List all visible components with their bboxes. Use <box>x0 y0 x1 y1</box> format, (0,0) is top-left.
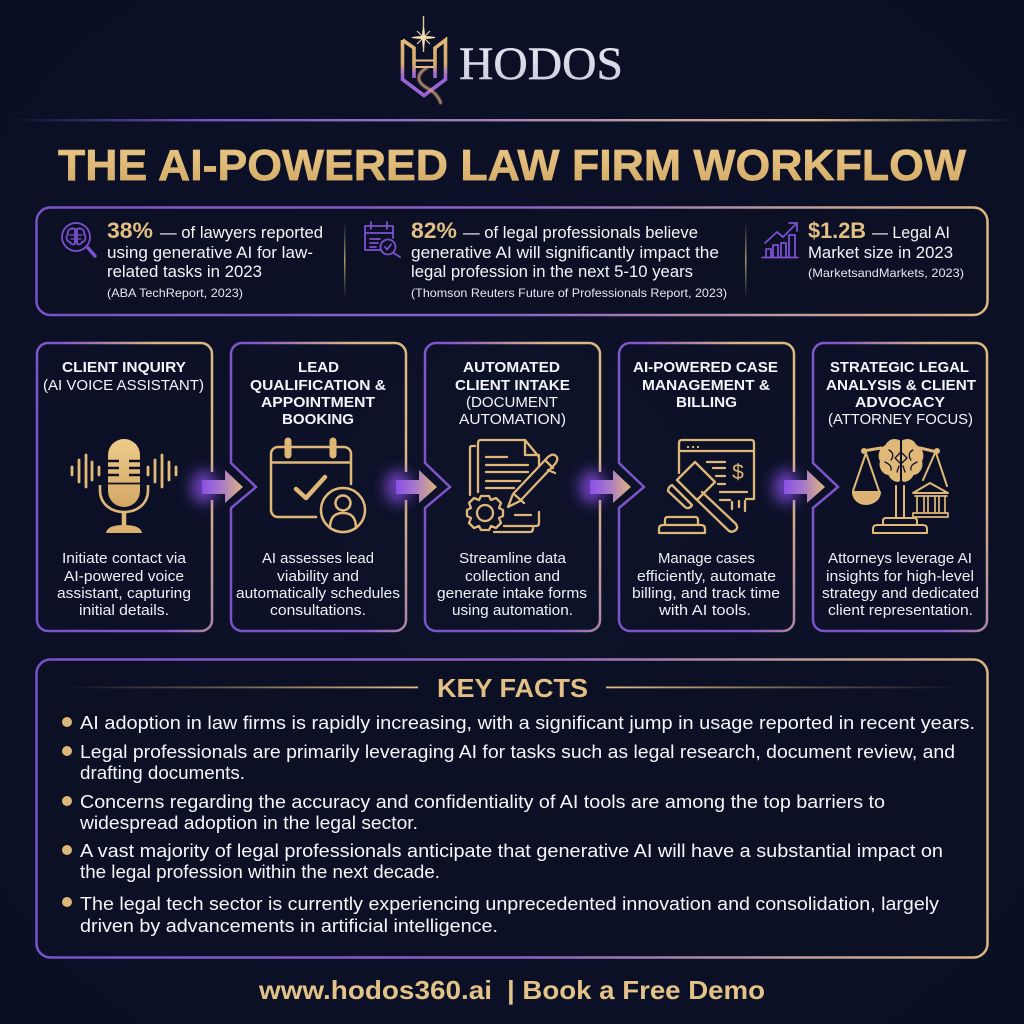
stat: 82 percent: legal profession in the next 5-10 years <box>411 262 693 281</box>
fact 4: the legal profession within the next decade. <box>80 862 440 882</box>
key facts heading: KEY FACTS <box>437 673 588 703</box>
card 4 description: billing, and track time <box>632 586 780 602</box>
card 4 description: efficiently, automate <box>637 569 776 585</box>
card 3 heading: AUTOMATED <box>463 359 560 376</box>
fact 5 <box>62 894 939 936</box>
panel: statistics <box>36 208 988 315</box>
stat: 82 percent: 82% <box>411 218 457 243</box>
icon: calendar search <box>365 222 400 257</box>
card 2 heading: LEAD <box>298 359 339 376</box>
footer call to action: | Book a Free Demo <box>507 975 765 1005</box>
card 5 description: Attorneys leverage AI <box>828 551 972 567</box>
card 1 description: initial details. <box>79 603 169 619</box>
card 3 description <box>437 551 587 619</box>
card 2 description <box>236 551 400 619</box>
panel: key facts <box>36 660 988 958</box>
card 1 description: AI-powered voice <box>64 569 184 585</box>
card 4: case management and billing <box>619 343 794 631</box>
footer call to action: www.hodos360.ai <box>258 975 492 1005</box>
fact 1: AI adoption in law firms is rapidly increasing, with a significant jump in usage reported in recent years. <box>80 713 975 733</box>
stat: 82 percent: (Thomson Reuters Future of Professionals Report, 2023) <box>411 286 727 300</box>
fact 2 <box>62 742 955 783</box>
card 2 heading: APPOINTMENT <box>261 394 375 411</box>
card 4 heading <box>633 359 778 411</box>
card 1 description: Initiate contact via <box>62 551 187 567</box>
card 2 description: viability and <box>277 569 359 585</box>
card 3 description: collection and <box>465 569 560 585</box>
stat: 1.2B market: Market size in 2023 <box>808 243 953 262</box>
card 2 heading <box>250 359 386 428</box>
fact 3: widespread adoption in the legal sector. <box>79 813 418 833</box>
icon: rising bar chart <box>762 223 798 258</box>
stat: 38 percent <box>107 218 323 300</box>
card 3 heading: AUTOMATION) <box>459 411 566 428</box>
card 4 heading: MANAGEMENT & <box>642 377 770 394</box>
fact 4: A vast majority of legal professionals anticipate that generative AI will have a substantial impact on <box>80 841 943 861</box>
icon: brain magnifier <box>62 223 95 256</box>
stat: 1.2B market <box>808 218 964 280</box>
card 1 heading: (AI VOICE ASSISTANT) <box>43 377 204 394</box>
card 2 description: AI assesses lead <box>262 551 374 567</box>
stat: 1.2B market: — Legal AI <box>872 223 950 242</box>
icon: gavel and invoice window <box>659 440 754 533</box>
card 3 description: using automation. <box>452 603 573 619</box>
card 2 description: consultations. <box>270 603 366 619</box>
fact 4 <box>62 841 943 882</box>
card 1 description: assistant, capturing <box>57 586 191 602</box>
title: THE AI-POWERED LAW FIRM WORKFLOW <box>58 141 966 190</box>
card 3 description: generate intake forms <box>437 586 587 602</box>
card 5 description: insights for high-level <box>826 569 974 585</box>
stat: 38 percent: (ABA TechReport, 2023) <box>107 286 243 300</box>
arrow: step 1 to 2 <box>191 470 243 504</box>
card 5 description: client representation. <box>828 603 973 619</box>
stat: 1.2B market: (MarketsandMarkets, 2023) <box>808 266 964 280</box>
icon: calendar with person <box>271 441 365 532</box>
card 5 heading <box>826 359 976 428</box>
logo header <box>402 16 623 104</box>
card 1 description <box>57 551 191 619</box>
stat: 38 percent: using generative AI for law- <box>107 243 313 262</box>
card 4 description <box>632 551 780 619</box>
arrow: step 3 to 4 <box>579 470 631 504</box>
stat: 38 percent: related tasks in 2023 <box>107 262 262 281</box>
card 3 heading <box>455 359 570 428</box>
icon: microphone <box>72 439 176 533</box>
wordmark: HODOS <box>459 38 623 90</box>
card 5 heading: ANALYSIS & CLIENT <box>826 377 976 394</box>
card 5 heading: (ATTORNEY FOCUS) <box>828 411 973 428</box>
fact 5: The legal tech sector is currently experiencing unprecedented innovation and consolidation, largely <box>80 894 939 914</box>
stat: 82 percent: — of legal professionals believe <box>463 223 698 242</box>
fact 3 <box>62 792 885 833</box>
card 4 description: with AI tools. <box>658 603 751 619</box>
card 3 heading: (DOCUMENT <box>466 394 558 411</box>
card 3 description: Streamline data <box>459 551 567 567</box>
card 2 description: automatically schedules <box>236 586 400 602</box>
fact 3: Concerns regarding the accuracy and confidentiality of AI tools are among the top barriers to <box>80 792 885 812</box>
card 4 heading: AI-POWERED CASE <box>633 359 778 376</box>
stat: 82 percent: generative AI will significantly impact the <box>411 243 719 262</box>
card 4 heading: BILLING <box>676 394 737 411</box>
card 5 description: strategy and dedicated <box>822 586 979 602</box>
card 3: automated client intake <box>425 343 600 631</box>
card 5 heading: ADVOCACY <box>855 394 945 411</box>
fact 5: driven by advancements in artificial intelligence. <box>80 916 498 936</box>
stat: 38 percent: — of lawyers reported <box>160 223 323 242</box>
fact 2: Legal professionals are primarily leveraging AI for tasks such as legal research, document review, and <box>80 742 955 762</box>
stat: 82 percent <box>411 218 727 300</box>
card 5 description <box>822 551 979 619</box>
card 5 heading: STRATEGIC LEGAL <box>830 359 969 376</box>
card 2 heading: QUALIFICATION & <box>250 377 386 394</box>
icon: document with pen and gear <box>467 440 557 532</box>
arrow: step 4 to 5 <box>773 470 825 504</box>
card 2 heading: BOOKING <box>282 411 354 428</box>
footer call to action <box>258 975 765 1005</box>
arrow: step 2 to 3 <box>385 470 437 504</box>
card 1: client inquiry <box>37 343 212 631</box>
stat: 1.2B market: $1.2B <box>808 218 866 243</box>
card 4 description: Manage cases <box>658 551 755 567</box>
icon: dollar sign: $ <box>732 461 744 484</box>
icon: shield logo <box>402 16 446 104</box>
card 2: lead qualification <box>231 343 406 631</box>
card 1 heading <box>43 359 204 394</box>
card 3 heading: CLIENT INTAKE <box>455 377 570 394</box>
icon: scales with brain and courthouse <box>853 440 948 533</box>
card 1 heading: CLIENT INQUIRY <box>62 359 186 376</box>
card 5: strategic legal analysis <box>813 343 987 631</box>
stat: 38 percent: 38% <box>107 218 153 243</box>
fact 2: drafting documents. <box>80 763 245 783</box>
